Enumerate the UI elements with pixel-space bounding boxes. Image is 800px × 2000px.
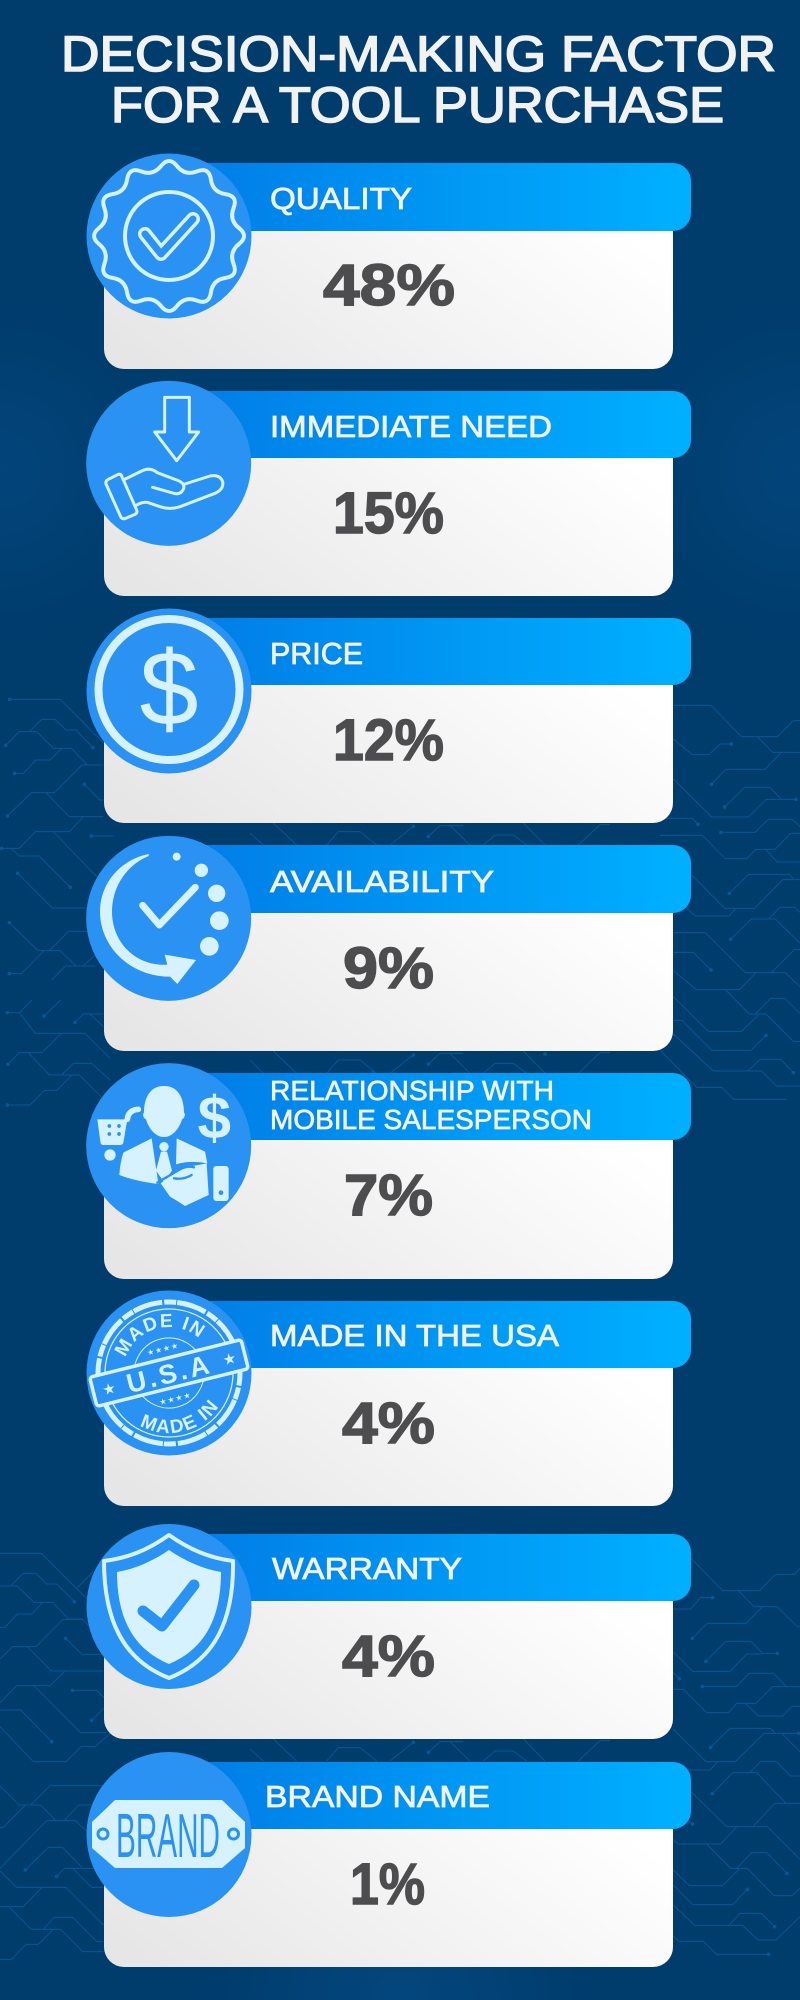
- value: 9%: 9%: [343, 936, 434, 1001]
- circuit pattern: gap lines lower: [250, 1739, 610, 1761]
- label: price: PRICE: [270, 636, 363, 671]
- panel: price: [86, 608, 691, 823]
- icon: circular arrow with check: [86, 836, 251, 1001]
- circuit pattern: lower right: [660, 1558, 800, 1954]
- panel: brand name: [86, 1752, 691, 1967]
- icon: brand tag: BRAND: [116, 1802, 220, 1871]
- value: 1%: 1%: [350, 1852, 425, 1917]
- circuit pattern: middle right: [660, 705, 800, 1099]
- panel: relationship with mobile salesperson: [86, 1063, 691, 1279]
- icon: made in usa stamp: ★★★★: [158, 1390, 192, 1407]
- label: brand name: BRAND NAME: [265, 1779, 490, 1814]
- label: warranty: WARRANTY: [272, 1551, 462, 1586]
- title: DECISION-MAKING FACTOR: [61, 26, 776, 82]
- icon: made in usa stamp: [86, 1290, 252, 1456]
- value: 48%: 48%: [323, 253, 455, 318]
- label: relationship with mobile salesperson: [270, 1075, 592, 1135]
- value: 4%: 4%: [342, 1624, 435, 1689]
- circuit pattern: middle left: [2, 699, 113, 1105]
- icon: made in usa stamp: ★: [101, 1380, 118, 1399]
- icon: brand tag: [86, 1752, 252, 1917]
- icon: made in usa stamp: ★: [221, 1350, 238, 1369]
- panel: made in the usa: [86, 1290, 691, 1506]
- icon: dollar coin: $: [140, 630, 198, 748]
- title: [61, 26, 776, 133]
- circuit pattern: lines in the gaps between cards: [250, 1051, 610, 1073]
- value: 4%: 4%: [342, 1391, 435, 1456]
- icon: made in usa stamp: MADE IN: [114, 1314, 206, 1356]
- icon: made in usa stamp: ★★★★: [146, 1341, 180, 1358]
- icon: salesperson with cart, dollar and handshake: $: [198, 1084, 231, 1151]
- label: availability: AVAILABILITY: [270, 864, 494, 899]
- circuit pattern: lower left: [0, 1553, 110, 1959]
- label: immediate need: IMMEDIATE NEED: [270, 409, 552, 444]
- value: 7%: 7%: [344, 1163, 433, 1228]
- icon: arrow into open hand: [86, 381, 251, 546]
- label: relationship with mobile salesperson: RELATIONSHIP WITH: [270, 1075, 554, 1106]
- panel: immediate need: [86, 381, 691, 596]
- icon: quality badge: [86, 154, 252, 318]
- label: quality: QUALITY: [270, 181, 412, 216]
- icon: shield with check: [86, 1524, 252, 1689]
- title: FOR A TOOL PURCHASE: [111, 77, 724, 133]
- icon: salesperson with cart, dollar and handshake: [86, 1063, 251, 1228]
- value: 15%: 15%: [333, 481, 444, 546]
- icon: made in usa stamp: MADE IN: [140, 1400, 218, 1434]
- panel: quality: [86, 154, 691, 369]
- panel: warranty: [86, 1524, 691, 1739]
- circuit pattern: gap lines middle: [250, 823, 610, 845]
- icon: dollar coin: [86, 608, 252, 774]
- panel: availability: [86, 836, 691, 1051]
- value: 12%: 12%: [333, 708, 444, 773]
- label: relationship with mobile salesperson: MOBILE SALESPERSON: [270, 1104, 592, 1135]
- label: made in the usa: MADE IN THE USA: [270, 1318, 559, 1353]
- icon: made in usa stamp: U.S.A: [123, 1349, 215, 1399]
